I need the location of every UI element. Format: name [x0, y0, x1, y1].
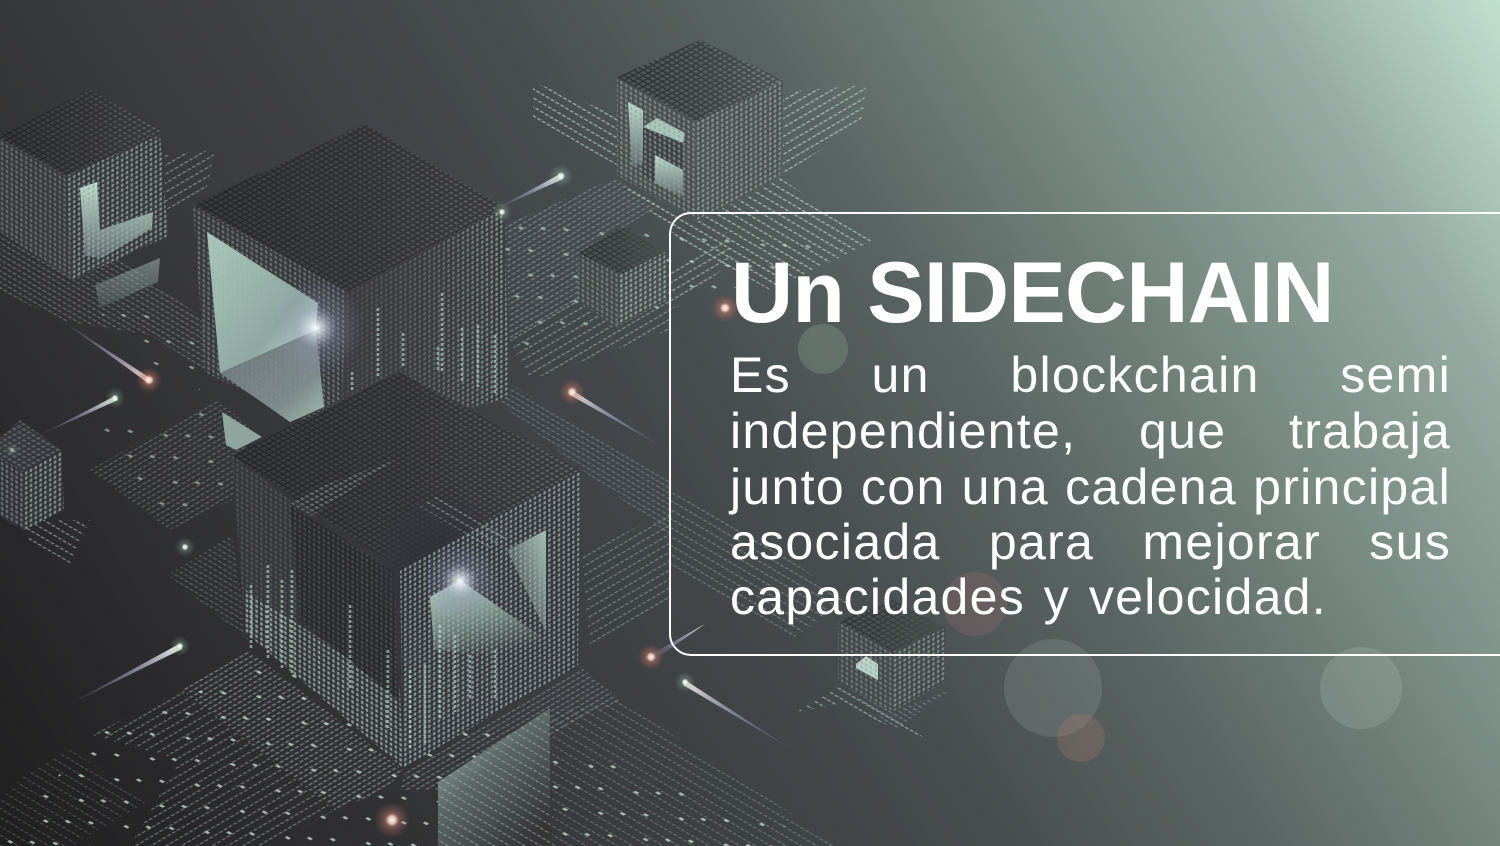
cube: small left — [0, 420, 64, 530]
cube: large upper — [193, 124, 512, 450]
rounded outline frame — [669, 212, 1500, 656]
cube: small centre — [577, 227, 667, 327]
dotted floor circuits — [0, 82, 950, 846]
body text — [728, 347, 1451, 625]
bokeh circles — [798, 324, 1402, 762]
cube: small right — [838, 600, 946, 712]
body text: independiente, que trabaja — [730, 403, 1451, 459]
title: Un SIDECHAIN — [731, 245, 1334, 341]
body text: asociada para mejorar sus — [730, 514, 1451, 570]
cube: large lower — [232, 372, 580, 846]
cube: top-left — [0, 90, 168, 280]
cube: top-centre — [617, 40, 783, 220]
glowing data trails — [38, 164, 796, 838]
body text: Es un blockchain semi — [730, 347, 1451, 403]
body text: junto con una cadena principal — [730, 459, 1451, 515]
body text: capacidades y velocidad. — [730, 569, 1327, 625]
